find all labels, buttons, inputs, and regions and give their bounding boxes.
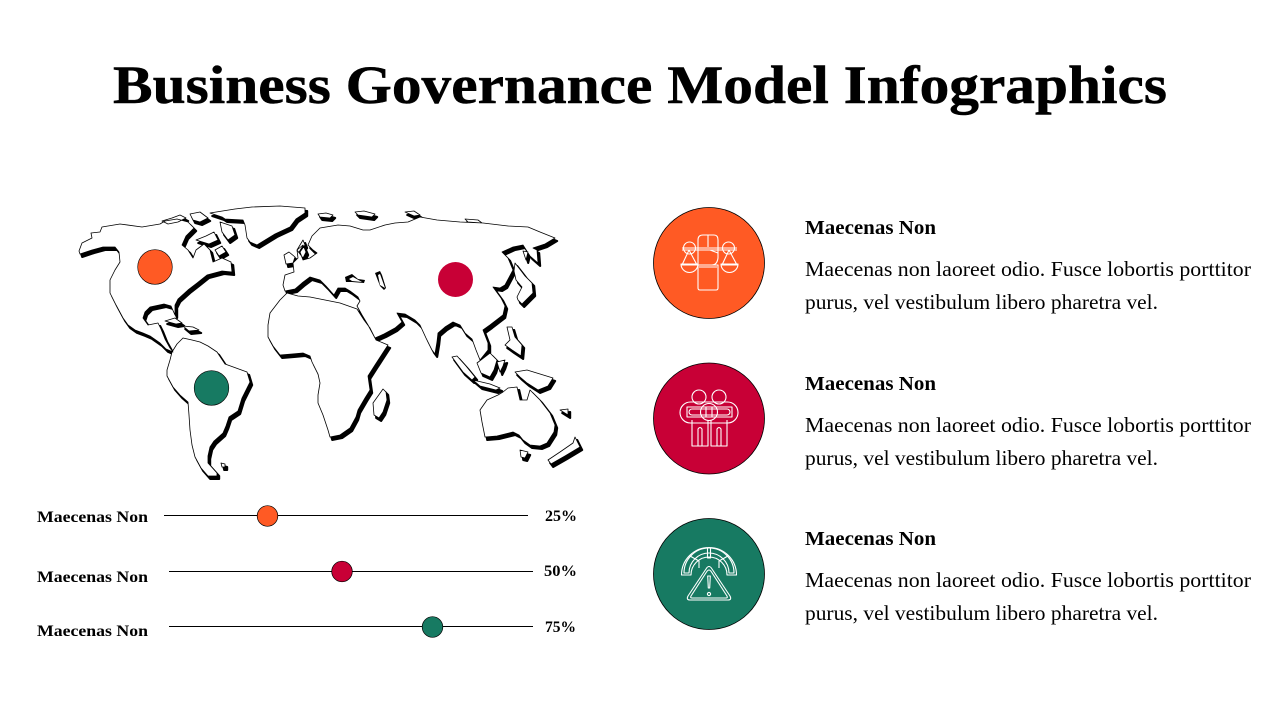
heading and text: item 2 <box>805 373 1251 470</box>
heading and text: item 3: Maecenas Non <box>805 528 936 550</box>
slider row 2 <box>37 561 577 586</box>
heading and text: item 1 <box>805 217 1251 314</box>
slider row 1: 25% <box>545 508 577 525</box>
heading and text: item 3 <box>805 528 1251 625</box>
heading and text: item 2: Maecenas non laoreet odio. Fusce lobortis porttitor <box>805 413 1251 437</box>
slider row 3: 75% <box>545 619 576 636</box>
heading and text: item 1: Maecenas non laoreet odio. Fusce lobortis porttitor <box>805 257 1251 281</box>
slider row 1 <box>37 506 577 526</box>
world map <box>79 206 582 479</box>
icon: two people shaking arms <box>654 363 764 474</box>
heading and text: item 3: purus, vel vestibulum libero pharetra vel. <box>805 601 1158 625</box>
slider row 3 <box>37 617 576 640</box>
slider row 2: 50% <box>544 563 577 580</box>
icon: gauge with warning triangle <box>654 518 764 630</box>
title: Business Governance Model Infographics <box>113 55 1167 115</box>
map marker: North America <box>138 250 172 284</box>
icon: justice fist and scales <box>654 208 764 318</box>
map marker: South America <box>194 371 229 405</box>
heading and text: item 2: Maecenas Non <box>805 373 936 395</box>
heading and text: item 3: Maecenas non laoreet odio. Fusce lobortis porttitor <box>805 568 1251 592</box>
heading and text: item 1: Maecenas Non <box>805 217 936 239</box>
map marker: Asia <box>438 262 473 297</box>
slider row 2: Maecenas Non <box>37 569 148 586</box>
slider row 3: Maecenas Non <box>37 623 148 640</box>
slider row 1: Maecenas Non <box>37 509 148 526</box>
heading and text: item 1: purus, vel vestibulum libero pharetra vel. <box>805 290 1158 314</box>
heading and text: item 2: purus, vel vestibulum libero pharetra vel. <box>805 446 1158 470</box>
